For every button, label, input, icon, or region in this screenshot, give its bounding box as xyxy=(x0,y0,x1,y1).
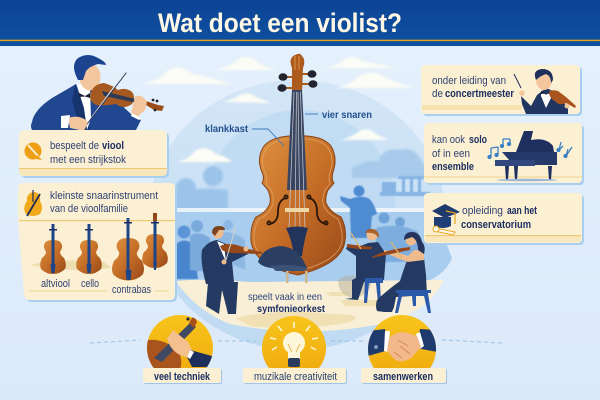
card text: conservatorium xyxy=(461,219,531,231)
card text: ensemble xyxy=(432,161,474,173)
header xyxy=(0,0,600,46)
card: onder leiding van de concertmeester xyxy=(421,65,582,116)
pegs xyxy=(278,70,318,92)
label: klankkast: klankkast xyxy=(205,123,248,135)
clouds xyxy=(143,57,414,162)
icon: bow xyxy=(24,142,42,160)
strings and bridge xyxy=(289,92,305,228)
card: opleiding aan het conservatorium xyxy=(424,193,584,245)
music notes xyxy=(488,139,572,158)
card text: van de vioolfamilie xyxy=(50,203,128,215)
tailpiece xyxy=(286,226,308,256)
small violin: cello: cello xyxy=(81,278,99,290)
scroll and pegbox xyxy=(291,54,304,92)
conductor silhouette xyxy=(340,186,377,238)
card text: kleinste snaarinstrument xyxy=(50,190,158,202)
body xyxy=(251,136,346,275)
stage band xyxy=(172,208,434,212)
small violin: cello xyxy=(76,224,102,290)
chair xyxy=(258,246,308,283)
connector dashes xyxy=(90,340,502,343)
card text: met een strijkstok xyxy=(50,154,126,166)
card text: onder leiding van xyxy=(432,75,506,87)
small violin: contrabas: contrabas xyxy=(112,284,151,296)
card text: opleiding xyxy=(462,205,503,217)
violin xyxy=(90,83,134,107)
standing violinist xyxy=(202,226,262,314)
background silhouettes xyxy=(172,149,428,212)
caption: speelt vaak in een symfonieorkest xyxy=(248,291,325,315)
card text: bespeelt de xyxy=(50,140,99,152)
card text xyxy=(432,75,515,100)
card text: de xyxy=(432,88,443,100)
label: klankkast xyxy=(205,123,284,146)
card text: concertmeester xyxy=(445,88,515,100)
card text xyxy=(50,140,126,166)
main violin xyxy=(251,54,346,275)
small violin: contrabas xyxy=(112,218,151,296)
card: kleinste snaarinstrument xyxy=(18,183,177,302)
stage floor xyxy=(176,280,444,332)
small violin: altviool xyxy=(40,224,70,290)
small violin: viool xyxy=(142,213,168,270)
seated violinist xyxy=(345,229,386,303)
caption: speelt vaak in een symfonieorkest: symfonieorkest xyxy=(257,303,325,315)
card text xyxy=(461,205,537,231)
card text: aan het xyxy=(507,205,537,217)
skill: veel techniek xyxy=(143,315,222,384)
card text: kan ook xyxy=(432,134,465,146)
label: muzikale creativiteit xyxy=(254,371,337,383)
card text: viool xyxy=(102,140,124,152)
orchestra silhouettes xyxy=(173,212,424,279)
icon: graduation cap and diploma xyxy=(432,204,460,235)
small violin: altviool: altviool xyxy=(41,278,70,290)
label: vier snaren: vier snaren xyxy=(322,109,372,121)
hands xyxy=(131,96,147,118)
balustrade xyxy=(380,176,430,196)
card text: solo xyxy=(469,134,487,146)
bow xyxy=(81,72,125,132)
label: vier snaren xyxy=(305,109,372,121)
top-left violinist xyxy=(31,55,164,132)
f-holes xyxy=(267,195,328,225)
card: kan ook solo xyxy=(424,123,584,185)
card text xyxy=(50,190,158,215)
central concert scene xyxy=(143,57,452,350)
dome xyxy=(149,80,445,350)
seated woman violinist xyxy=(372,232,431,313)
icon: violin crossed xyxy=(24,190,42,216)
piano icon xyxy=(495,131,557,181)
conductor icon xyxy=(514,69,576,114)
card text: of in een xyxy=(432,148,470,160)
skill: muzikale creativiteit xyxy=(243,316,347,384)
caption: speelt vaak in een symfonieorkest: speelt vaak in een xyxy=(248,291,322,303)
title: Wat doet een violist? xyxy=(158,8,402,38)
label: veel techniek xyxy=(154,371,211,383)
skill: samenwerken xyxy=(361,315,447,384)
fingerboard xyxy=(287,90,307,190)
card: bespeelt de viool xyxy=(19,130,169,178)
label: samenwerken xyxy=(373,371,433,383)
card text xyxy=(432,134,487,173)
